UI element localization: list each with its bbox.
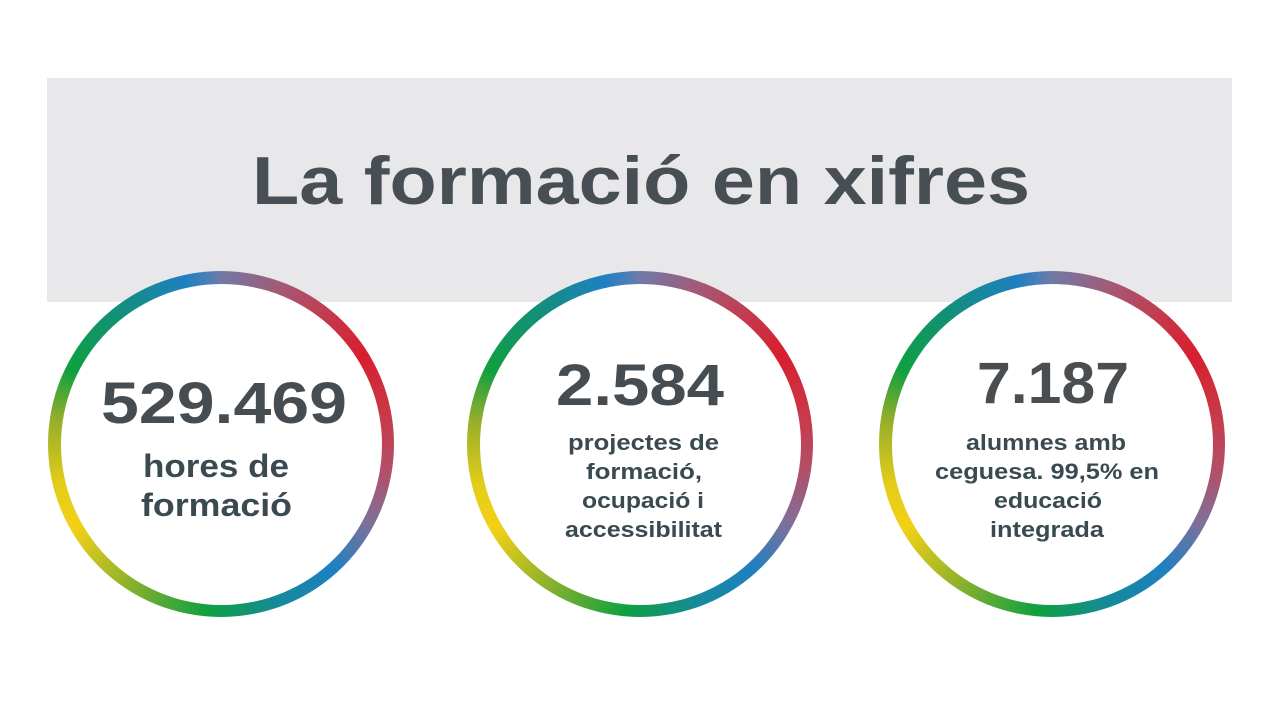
ring: students	[879, 271, 1225, 617]
label: students	[935, 430, 1159, 542]
ring: projects	[467, 271, 813, 617]
label: projects: projectes de	[568, 430, 719, 455]
number: 7.187: 7.187	[977, 351, 1129, 416]
label: projects	[565, 430, 723, 542]
label: projects: accessibilitat	[565, 517, 723, 542]
header band	[47, 78, 1232, 302]
label: hours of training: formació	[141, 487, 292, 523]
label: students: integrada	[990, 517, 1105, 542]
title: La formació en xifres	[252, 143, 1030, 219]
label: hours of training: hores de	[143, 448, 289, 484]
stat: students	[935, 351, 1159, 542]
number: 529.469: 529.469	[101, 371, 347, 436]
number: 2.584: 2.584	[556, 353, 724, 418]
stat: projects	[556, 353, 724, 542]
label: projects: ocupació i	[582, 488, 704, 513]
label: projects: formació,	[586, 459, 702, 484]
label: hours of training	[141, 448, 292, 523]
label: students: ceguesa. 99,5% en	[935, 459, 1159, 484]
stat: hours of training	[101, 371, 347, 523]
label: students: alumnes amb	[966, 430, 1126, 455]
ring: hours	[48, 271, 394, 617]
label: students: educació	[994, 488, 1102, 513]
